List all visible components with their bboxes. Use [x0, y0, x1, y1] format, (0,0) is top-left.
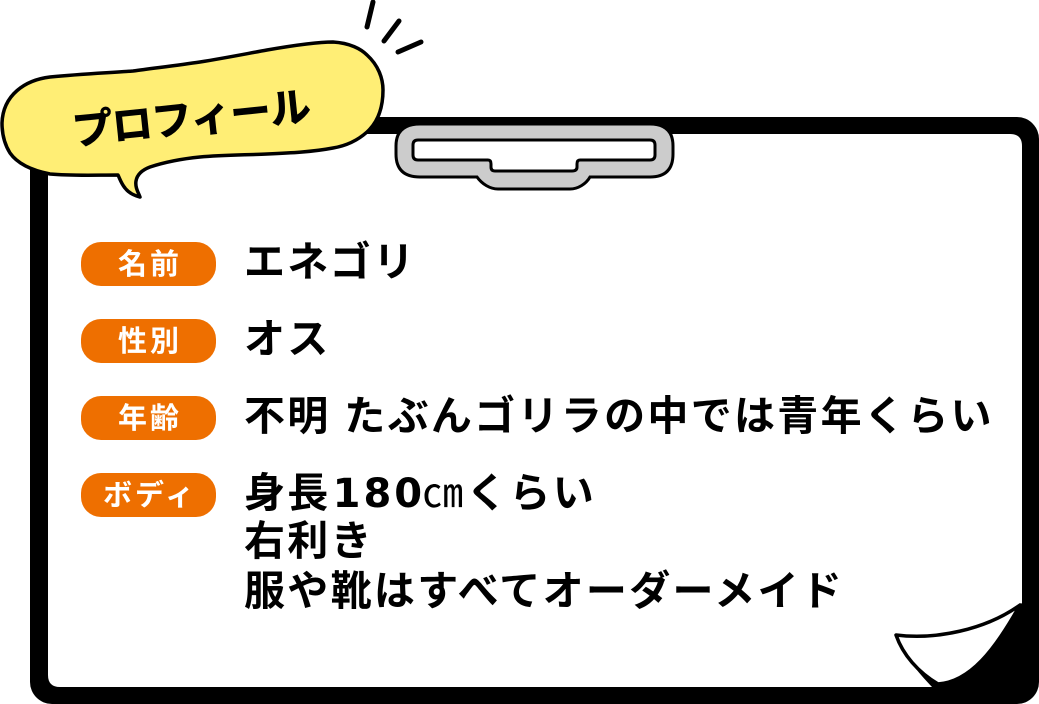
heading: profile: プロフィール	[70, 83, 312, 154]
icon: clip	[396, 124, 673, 189]
row: body: 右利き	[244, 518, 374, 564]
row: gender	[81, 316, 331, 363]
row: body: 身長180㎝くらい	[244, 470, 596, 517]
row: body: 服や靴はすべてオーダーメイド	[244, 568, 844, 614]
row: gender: 性別	[118, 325, 182, 358]
callout: profile speech bubble	[2, 42, 383, 197]
row: body	[81, 470, 844, 614]
icon: emphasis lines	[367, 2, 421, 52]
row: gender: オス	[244, 316, 331, 362]
icon: page curl	[896, 605, 1020, 684]
row: name: 名前	[118, 248, 182, 281]
row: age: 不明 たぶんゴリラの中では青年くらい	[244, 393, 994, 439]
row: name	[81, 239, 416, 286]
row: body: ボディ	[103, 478, 197, 512]
row: age: 年齢	[118, 402, 182, 435]
row: name: エネゴリ	[244, 239, 416, 285]
